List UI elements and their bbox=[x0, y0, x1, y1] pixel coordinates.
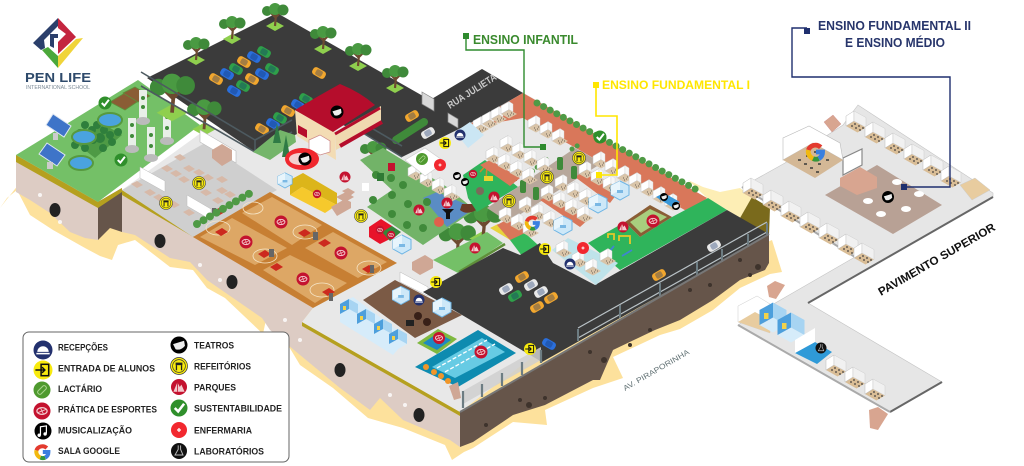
legend labels left: RECEPÇÕES bbox=[58, 342, 108, 352]
legend box bbox=[23, 332, 289, 462]
google room desks bbox=[798, 152, 829, 172]
legend labels right: ENFERMARIA bbox=[194, 426, 252, 436]
logo mark bbox=[33, 18, 83, 68]
pirate ship bbox=[460, 204, 478, 213]
legend labels left bbox=[58, 342, 157, 456]
legend labels right: LABORATÓRIOS bbox=[194, 446, 264, 456]
terracotta band bbox=[468, 93, 707, 213]
soil rocks bbox=[484, 258, 761, 427]
crop beds bbox=[110, 93, 140, 110]
terracotta strips bbox=[480, 160, 620, 227]
gold edge garden bbox=[16, 155, 122, 208]
west stairs bbox=[767, 281, 785, 299]
theatre floor ring bbox=[285, 148, 319, 170]
olympic pool bbox=[415, 330, 516, 400]
main floor bbox=[122, 69, 727, 412]
park icons bbox=[340, 172, 628, 254]
vertical garden towers bbox=[125, 90, 174, 162]
north fences bbox=[141, 72, 402, 157]
terrain sand bbox=[0, 170, 782, 460]
lower arm rooms bbox=[738, 296, 885, 400]
red kids block bbox=[369, 219, 401, 244]
gym building bbox=[295, 84, 382, 160]
ponds bbox=[69, 113, 122, 170]
legend labels right: PARQUES bbox=[194, 382, 236, 392]
wall: main block bbox=[122, 190, 460, 447]
sports icons bbox=[240, 170, 660, 358]
gym second trim bbox=[340, 122, 382, 146]
legend labels right: SUSTENTABILIDADE bbox=[194, 404, 282, 414]
gold edge lower block bbox=[302, 322, 460, 416]
theatre icons bbox=[298, 106, 894, 210]
heading: Ensino Fundamental II e Ensino Medio: ENSINO FUNDAMENTAL II bbox=[818, 19, 971, 33]
fence rails bbox=[463, 350, 541, 408]
south stairs bbox=[869, 407, 888, 430]
forest patch bbox=[72, 122, 122, 158]
room by central garden bbox=[393, 235, 411, 254]
heading: Ensino Fundamental II e Ensino Medio bbox=[818, 19, 971, 50]
classroom rows ground floor bbox=[408, 102, 681, 238]
drain pipes bbox=[50, 203, 424, 422]
leader: Ensino Fundamental I bbox=[593, 82, 617, 178]
small pool bbox=[417, 329, 457, 354]
wall: garden block shadow side bbox=[98, 188, 122, 240]
legend labels left: ENTRADA DE ALUNOS bbox=[58, 364, 155, 374]
pirate play area bbox=[423, 192, 475, 227]
crop bed 2 bbox=[123, 87, 150, 102]
solar panels bbox=[39, 114, 71, 169]
sustainability icons bbox=[98, 96, 606, 166]
gym front wall bbox=[295, 110, 336, 160]
sports courts bbox=[193, 192, 397, 308]
back hedge bbox=[537, 103, 697, 190]
west classroom row bbox=[743, 178, 874, 264]
south east play green bbox=[588, 198, 727, 270]
mesh fence bbox=[463, 347, 541, 404]
signboards bbox=[362, 163, 395, 191]
court mats bbox=[212, 208, 375, 296]
court posts bbox=[212, 208, 374, 301]
entry icons bbox=[430, 137, 551, 355]
back sand and olive wall bbox=[688, 180, 770, 235]
legend icons left bbox=[34, 340, 52, 458]
north classroom row bbox=[846, 111, 961, 188]
dining banners bbox=[140, 167, 211, 220]
cliff: east side soil bbox=[460, 232, 769, 447]
court lines bbox=[206, 202, 381, 297]
east fence bottom bbox=[578, 232, 767, 338]
garden hedges and forest bbox=[69, 87, 150, 170]
dining area grey floor bbox=[122, 143, 277, 237]
octopus bbox=[434, 217, 444, 227]
refectory icons bbox=[160, 152, 586, 222]
taupe walkway bbox=[487, 148, 602, 222]
stairs and kiosk bbox=[400, 255, 433, 296]
cypress trees bbox=[273, 123, 290, 157]
central garden bbox=[360, 148, 478, 245]
reception south bbox=[552, 238, 618, 285]
leader: Ensino Infantil bbox=[463, 33, 546, 150]
leader: Ensino Fundamental II bbox=[792, 28, 950, 190]
parking north bbox=[147, 13, 523, 157]
blue rooms west bbox=[340, 297, 408, 355]
black figure bbox=[442, 209, 454, 219]
logo bbox=[25, 18, 91, 91]
garden lawn bbox=[16, 80, 200, 202]
street label Rua Julieta: RUA JULIETA bbox=[446, 72, 499, 112]
upper floor slab bbox=[738, 105, 993, 430]
google room floor bbox=[783, 143, 843, 178]
street label Av. Piraporinha: AV. PIRAPORINHA bbox=[622, 347, 691, 393]
gym side wall bbox=[335, 106, 381, 150]
foundation walls bbox=[16, 155, 769, 447]
gym roof bbox=[295, 84, 375, 132]
legend labels left: SALA GOOGLE bbox=[58, 446, 120, 456]
gym door bbox=[298, 125, 307, 138]
gym kiosk bbox=[309, 135, 330, 155]
heading: Ensino Infantil: ENSINO INFANTIL bbox=[473, 33, 578, 47]
legend labels right: REFEITÓRIOS bbox=[194, 360, 251, 372]
walkway hedges bbox=[520, 143, 582, 200]
screen bbox=[843, 149, 862, 175]
trees bbox=[150, 3, 503, 262]
gold edge dining bbox=[122, 190, 195, 238]
legend icons right bbox=[170, 336, 188, 459]
heading: Ensino Fundamental I: ENSINO FUNDAMENTAL I bbox=[602, 78, 750, 92]
east cliff cap bbox=[460, 234, 769, 412]
stairs gym bbox=[331, 188, 355, 216]
garden saplings bbox=[369, 171, 431, 232]
upper carpet bbox=[825, 165, 942, 234]
legend labels left: PRÁTICA DE ESPORTES bbox=[58, 404, 157, 414]
stairs dining bbox=[200, 130, 236, 166]
label Pavimento Superior: PAVIMENTO SUPERIOR bbox=[876, 221, 998, 299]
other service icons bbox=[414, 130, 826, 354]
stairs upper bbox=[824, 115, 841, 132]
south fences bbox=[460, 222, 769, 412]
parking gates bbox=[422, 92, 458, 128]
legend labels right bbox=[194, 340, 282, 456]
round tables bbox=[863, 179, 924, 217]
logo subtitle: INTERNATIONAL SCHOOL bbox=[26, 85, 90, 91]
heading: Ensino Fundamental II e Ensino Medio: E ENSINO MÉDIO bbox=[845, 35, 945, 50]
dining hedge bbox=[197, 192, 252, 224]
south parking bbox=[423, 210, 769, 362]
north parking cars bbox=[208, 45, 436, 140]
dining tables bbox=[131, 154, 236, 216]
infant playground bbox=[463, 160, 518, 212]
east fence top bbox=[578, 222, 767, 328]
blue rooms bbox=[405, 122, 680, 235]
pale pebbles bbox=[38, 193, 407, 407]
stage bbox=[840, 167, 877, 195]
brown lobby floor bbox=[363, 280, 462, 338]
east fence posts bbox=[578, 223, 767, 341]
wall: garden block bbox=[16, 155, 98, 240]
legend labels right: TEATROS bbox=[194, 340, 234, 350]
gym roof trim bbox=[335, 108, 380, 134]
logo name: PEN LIFE bbox=[25, 71, 91, 85]
lawn near gym bbox=[253, 130, 296, 160]
google room walls bbox=[783, 126, 843, 160]
meeting room bbox=[960, 178, 990, 200]
lower hedge garden bbox=[433, 218, 538, 273]
yellow refectory block bbox=[278, 173, 337, 213]
south parking cars bbox=[498, 239, 722, 351]
legend labels left: MUSICALIZAÇÃO bbox=[58, 426, 132, 436]
legend labels left: LACTÁRIO bbox=[58, 384, 102, 394]
forest trees bbox=[71, 121, 122, 152]
legend panel bbox=[23, 332, 289, 462]
